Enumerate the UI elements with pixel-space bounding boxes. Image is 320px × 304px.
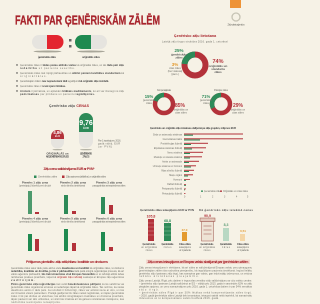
chart: small donut left: oriģinālās un <box>174 108 189 112</box>
chart: costs bottles left: Ģenēriskās <box>162 242 174 246</box>
chart: price comparison capsules: ZĀLES <box>82 154 90 158</box>
text: why generics paragraphs: valsts aģentūru pārbaudīti, tās tiek izmantotas visā Eiropas Savienībā un to ražotāji atbilst labas <box>11 272 125 276</box>
text: why generics paragraphs <box>11 266 125 304</box>
chart: costs bottles left: ietaupījums <box>179 246 192 249</box>
chart: total market donut: ģenēriskās <box>171 52 187 56</box>
chart: total market donut: 74% <box>212 59 224 65</box>
chart: horizontal bars by medicine group: Pretparazītu līdzekļi <box>162 188 182 190</box>
chart: horizontal bars by medicine group: Gremošanas trakts <box>163 138 183 141</box>
chart: costs bottles right: zāles <box>222 246 231 249</box>
chart: total market donut <box>168 48 228 76</box>
chart: costs bottles right: Ģenēriskās <box>200 242 214 246</box>
text: right paragraphs: ģenērisko zāļu īpatsvaru zāļu tirgū, kas samazina gan valsts, gan iedzīvotāju izdevumus, un veicina <box>139 272 253 276</box>
subheading: survey question: Latvijā zāļu tirgus struktūra 2016. gada 1. ceturksnī <box>162 40 228 44</box>
heading: price comparison: Zāļu cenu salīdzinājums EUR ar PVN* <box>44 167 95 171</box>
chart: small donut left: citas zāles <box>175 112 188 114</box>
chart: costs bottles right: 8,3 <box>224 223 228 227</box>
captions: column headings top row: paaugstināta asinsspiediena zāles <box>92 184 126 188</box>
heading: cost per medicine: Kā ģenērisko zāļu ietekmē cenas <box>199 207 253 212</box>
chart: small donut right <box>200 89 246 114</box>
chart: small donut right: oriģinālās un <box>231 108 246 112</box>
chart: price comparison capsules: EUR <box>55 135 60 138</box>
chart: horizontal bars by medicine group: Elpošanas sistēmas līdzekļi <box>154 147 182 150</box>
title: FAKTI PAR ĢENĒRISKĀM ZĀLĒM <box>15 12 160 28</box>
chart: costs bottles right: Ģenēriskās <box>220 242 233 246</box>
chart: small donut left: 15% <box>145 94 153 99</box>
text: why generics paragraphs: iedarbība, kvalitāte un drošība, jo tās ir pārbaudītas tādā pašā stingrā reģistrācijas procesā, kā arī <box>11 269 124 273</box>
legend: Ģenēriskās zāles <box>38 176 58 179</box>
captions: column headings bottom row: (pretsāpju) līdzekļi pret drudzi <box>19 220 51 224</box>
text: why generics paragraphs: vadlīnijām. <box>11 278 35 282</box>
text: bullet list: Ģenēriskās zāles ir tādas pašas aktīvās vielas kā oriģinālās zāles, un tās tāda pati zāļu <box>20 63 124 67</box>
chart: horizontal bars by medicine group: Maņu orgāni <box>169 174 182 177</box>
chart: price comparison capsules: 9,76 <box>79 120 93 127</box>
chart: small donut right: 71% <box>202 94 210 99</box>
chart: small donut left: 85% <box>175 103 186 109</box>
captions: column headings top row: Piemērs 3 zāļu cena <box>96 180 123 184</box>
logo: Zāļu valsts aģentūra <box>228 24 245 26</box>
chart: small donut left: Kompensējamās <box>157 89 172 92</box>
icon: generic and original pills: oriģinālās zāles <box>82 54 101 59</box>
chart: costs bottles left: Citas zāles <box>179 242 192 246</box>
legend <box>34 176 107 179</box>
captions: column headings bottom row: paaugstināta asinsspiediena zāles <box>92 220 126 224</box>
text: why generics paragraphs: ražošanas prakses prasībām, tāpat kā oriģinālo zāļu ražotāji saskaņā ar Eiropas zāļu aģentūras <box>11 276 125 279</box>
chart: costs bottles right: Citas zāles <box>237 242 250 246</box>
captions: column headings top row: Piemērs 2 zāļu cena <box>60 180 87 184</box>
chart: horizontal bars by medicine group: Dažādi līdzekļi <box>167 183 182 186</box>
chart: price comparison capsules: NEĢENĒRISKĀS ZĀLES <box>46 154 69 158</box>
chart: horizontal bars by medicine group: Oriģinālās un citas zāles <box>223 190 249 193</box>
chart: total market donut: oriģinālās un <box>209 63 228 68</box>
captions: column headings bottom row: Piemērs 4 zāļu cena <box>22 216 49 220</box>
chart: costs bottles right: uz 1 pacientu <box>237 249 250 252</box>
chart: total market donut: zāles <box>175 56 183 60</box>
chart: costs bottles left: 68,8 <box>164 219 171 223</box>
chart: small donut right: citas zāles <box>232 112 245 114</box>
text: right paragraphs: – ģenēriskās zāles Rīgā ir par 30% lētākas nekā kompensējamās zāles tirgū. <box>139 292 252 294</box>
text: right paragraphs: zāļu tirgū. <box>139 288 159 292</box>
text: bullet list: oriģinālzāles. <box>20 75 47 78</box>
chart: costs bottles right: zāles <box>204 249 211 252</box>
chart: price comparison capsules: 4,86 <box>53 130 62 135</box>
chart: horizontal bars by medicine group: 3 <box>224 196 226 198</box>
chart: horizontal bars by medicine group: 0 <box>184 196 186 198</box>
text: bullet list: Ģenēriskās zāles ir ievērojami lētākas. <box>20 84 66 88</box>
text: why generics paragraphs: Ģenēriskās zāles satur tādu pašu aktīvo vielu daudzumu un kvalitāti kā oriģinālās zāles, to drošums <box>11 266 125 270</box>
text: bullet list: pašizmaksas par pirkšanu un pacientu iegādājoties. <box>20 92 95 96</box>
heading: generic medicine use: Ģenērisko zāļu lietošana <box>174 34 217 38</box>
chart: horizontal bars by medicine group: Pretinfekcijas līdzekļi <box>161 142 182 146</box>
text: why generics paragraphs: daudzums asinīs ir tāds pats. Ja rezultāti ir līdzvērtīgi, zāles var aizstāt vienu ar otru, un tās <box>11 289 125 292</box>
chart: costs bottles right: 0,51 <box>240 229 246 233</box>
chart: costs bottles right <box>199 214 250 252</box>
text: right paragraphs: ģenēriskajām zālēm tās nodrošina pieejamību, kā ieguldījums pacienta ārstēšanā. Iegūst lielāku <box>139 270 253 272</box>
text: right paragraphs: Zāļu cenas ietaupījums ir vērtējams, kā arī zāles ar salīdzinājumā Eiropas valstu cenu pieaugumu <box>139 266 253 270</box>
logo <box>228 0 245 26</box>
captions: column headings bottom row: Piemērs 5 zāļu cena <box>60 216 87 220</box>
chart: horizontal bars by medicine group: Hormoni <box>173 178 182 182</box>
captions: column headings top row: sirds slimību ārstēšanai <box>61 184 85 188</box>
text: why generics paragraphs: Pirms ģenērisko zāļu reģistrācijas tiek veikti bioekvivalences pētījumi, kuros salīdzina vai <box>11 281 124 286</box>
chart: price comparison capsules: gadā vidēji, EUR <box>98 142 120 146</box>
chart: costs bottles left: un oriģinālās <box>141 246 158 249</box>
chart: small donut left: ģenēriskās <box>143 99 156 102</box>
chart: horizontal bars by medicine group <box>153 134 249 198</box>
chart: total market donut: (bez statusa) <box>168 70 182 73</box>
chart: horizontal bars by medicine group: 5 <box>247 196 249 198</box>
chart: costs bottles left: zāles <box>164 246 172 249</box>
text: right paragraphs <box>139 266 253 300</box>
chart: costs bottles left: zāles <box>146 249 153 252</box>
chart: horizontal bars by medicine group: Ādas slimību līdzekļi <box>161 170 182 172</box>
captions: column headings bottom row <box>19 216 126 224</box>
text: bullet list: Ģenēriskajām zālēm nav nepieciešami tādi ieguldījumi kā oriģinālo zāļu izstrādē. <box>20 78 109 83</box>
chart: horizontal bars by medicine group: Muskuļu un skeleta sistēma <box>154 156 183 159</box>
text: why generics paragraphs: ģenēriskās zāles organismā uzsūcas un iedarbojas tāpat kā oriģinālās zāles. Tas nozīmē, ka vielas <box>11 286 125 289</box>
chart: costs bottles right: ietaupījums <box>237 246 250 249</box>
chart: horizontal bars by medicine group: Sirds un asinsvadu sistēmas <box>153 134 183 136</box>
chart: horizontal bars by medicine group: Ģenēriskās zāles <box>204 190 222 193</box>
heading: saving callout: Zāļu cenas ietaupījums ar Eiropas valstu skatījumā par ģenēriskām zālēm <box>148 259 248 264</box>
text: right paragraphs: izdevumus un to kompensēšanu valsts budžetā 2016. gadā. <box>139 297 219 300</box>
chart: costs bottles left: Ģenēriskās <box>142 242 156 246</box>
heading: bar chart: Ģenērisko un oriģinālo zāļu izmaksas dalījumā pa zāļu grupām, miljonos EUR <box>150 125 236 130</box>
icon: generic and original pills <box>32 35 107 59</box>
chart: horizontal bars by medicine group: 4 <box>236 196 238 198</box>
chart: costs bottles right: un oriģinālās <box>199 246 216 249</box>
text: bullet list: Ģenēriskās zāles tiek rūpīgi pārbaudītas un atbilst pašiem kvalitātes standartiem kā <box>20 71 125 75</box>
chart: total market donut: standarta <box>211 67 225 71</box>
chart: small donut left: zāles <box>146 102 153 105</box>
chart: price comparison capsules: ORIĢINĀLĀS un <box>46 152 69 156</box>
chart: costs bottles left: uz 1 pacientu <box>179 249 192 252</box>
text: bullet list: iedarbība uz pacienta veselību. <box>20 66 75 70</box>
chart: price comparison capsules: (ar PVN) <box>98 146 112 148</box>
chart: horizontal bars by medicine group: Pretaudzēju līdzekļi <box>162 192 182 196</box>
chart: small donut right: Pārējās zāles <box>214 89 229 92</box>
chart: costs bottles left: 105,8 <box>147 214 155 218</box>
captions: column headings bottom row: sirds slimību ārstēšanai <box>61 220 85 224</box>
chart: price comparison capsules: ĢENĒRISKĀS <box>80 152 92 156</box>
captions: column headings top row: Piemērs 1 zāļu cena <box>22 180 49 184</box>
chart: costs bottles left: 37,0 <box>182 228 188 232</box>
chart: total market donut: zāles <box>214 70 222 74</box>
chart: total market donut: 3% <box>172 62 178 67</box>
text: why generics paragraphs: tāpēc pacienti var tām uzticēties, un ārsti tās izraksta arī kā galveno ārstēšanas risinājumu, kas <box>11 298 125 301</box>
chart: horizontal bars by medicine group: Asinis un asinsrade <box>162 160 183 164</box>
chart: horizontal bars by medicine group: 2 <box>212 196 214 198</box>
chart: vertical bar pairs bottom row <box>28 229 113 251</box>
icon: generic and original pills: ģenēriskās zāles <box>38 54 57 59</box>
chart: small donut right: zāles <box>203 102 210 105</box>
chart: small donut right: ģenēriskās <box>200 99 213 102</box>
text: bullet list <box>16 63 125 96</box>
chart: horizontal bars by medicine group: Urīnceļu sistēma un hormoni <box>153 165 182 168</box>
text: why generics paragraphs: zāles ir tik pat drošas un efektīvas; tās atbilst stingrākajiem kvalitātes un drošuma prasībām, <box>11 295 124 298</box>
chart: total market donut: citas zāles <box>169 67 182 70</box>
captions: column headings top row: (pretsāpju) līdzekļi pret drudzi <box>19 184 51 188</box>
chart: horizontal bars by medicine group: 1 <box>200 196 202 198</box>
heading: generic medicine prices: Ģenērisko zāļu CENAS <box>49 104 90 108</box>
chart: small donut right: 29% <box>233 103 244 109</box>
text: bullet list: Arstiem ir jāizraksta, un aptiekām lētākais medikaments, ko arī var izsniegt no zāļu <box>20 89 125 93</box>
chart: small donut left <box>143 89 189 114</box>
chart: price comparison capsules <box>46 113 121 158</box>
text: right paragraphs: piegādes apjoma, un cenu samazinājums pēc 2016. gada 1. ceturkšņa datiem ir par 54% zemākas <box>139 286 253 288</box>
text: why generics paragraphs: nodrošina ievērojamu ietaupījumu. <box>11 301 61 304</box>
chart: total market donut: 25% <box>174 48 184 53</box>
chart: horizontal bars by medicine group: Nervu sistēma <box>167 152 183 154</box>
chart: price comparison capsules: EUR <box>83 126 89 130</box>
text: right paragraphs: Zāļu cenas Latvijā, Rīgā, pēc datiem ir ieguvušas zemāko zāļu salīdzinājumu ar citu valstu cenām: <box>139 280 252 282</box>
heading: why generics: Pētījumos pierādīts: zāļu atšķirības: kvalitāte un drošums <box>26 260 108 264</box>
chart: costs bottles left <box>141 214 192 252</box>
text: why generics paragraphs: var izmantot visiem pacientiem. Pretējā gadījumā šīs zāles netiek reģistrētas, un tāpēc ģenēriskās <box>11 292 125 295</box>
captions: column headings top row <box>19 180 126 188</box>
heading: pharmacy cost saving: Ģenēriskās zāles ietaupījums EUR ar PVN <box>140 208 194 212</box>
chart: total market donut: (piem.) <box>171 73 179 76</box>
chart: costs bottles right: 90,9 <box>204 214 211 218</box>
chart: vertical bar pairs top row <box>28 191 113 214</box>
text: right paragraphs: – ģenērisko zāļu īpatsvars Latvijā salīdzinot ar ES – vidējā pēc 2015. gada ir sasniedzis 62% no zāļu <box>139 282 253 286</box>
text: right paragraphs: – 2016. gadā ģenēriskās zāles Latvijā tiek izmantotas, ietaupot vairāk nekā iepriekš, lai samazinātu <box>139 294 253 298</box>
chart: price comparison capsules: Par 1 iepakojumu 2016. <box>98 140 121 142</box>
captions: column headings bottom row: Piemērs 6 zāļu cena <box>96 216 123 220</box>
legend: Zāļu aptuvena (atšķirība) un oriģinālās zāles <box>66 176 107 179</box>
text: right paragraphs: labāku ārstēšanas pieejamību. <box>139 275 199 278</box>
